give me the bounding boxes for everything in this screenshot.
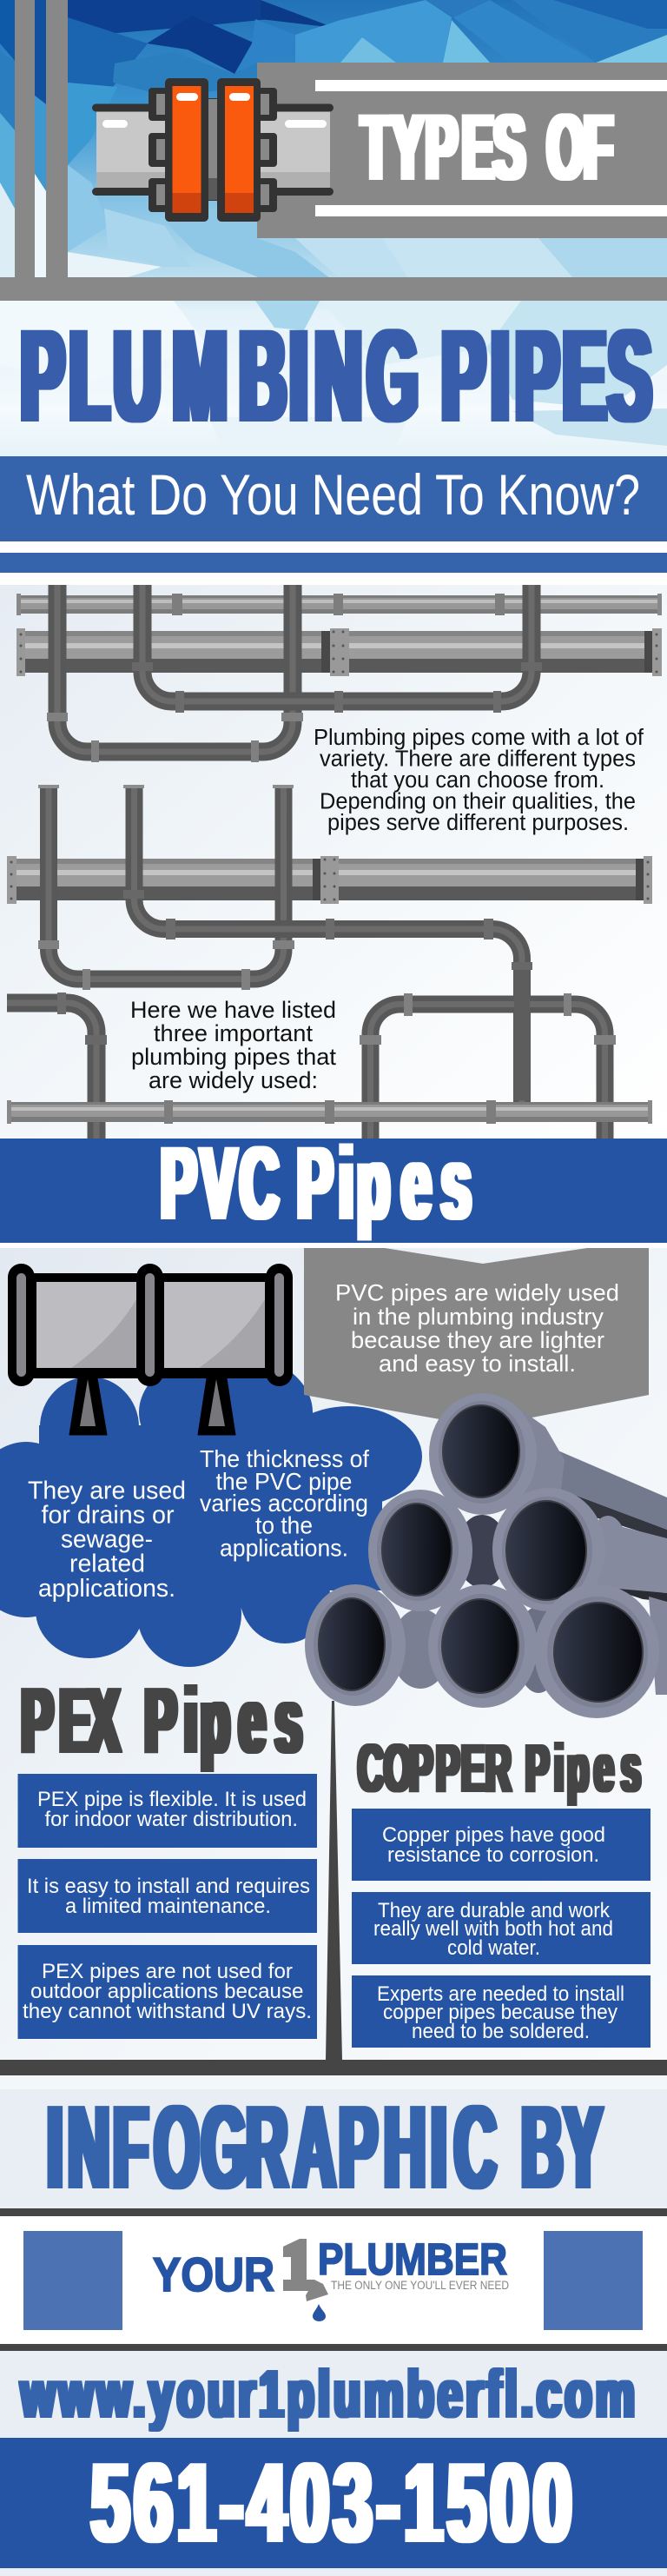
divider between pex and copper (326, 1701, 342, 2060)
logo: your 1 plumber: YOUR (153, 2247, 274, 2301)
logo: your 1 plumber: THE ONLY ONE YOU'LL EVER NEED (331, 2279, 509, 2292)
card: pex easy to install: a limited maintenance. (65, 1895, 271, 1918)
title banner: types of (257, 63, 667, 238)
card: pex flexible: for indoor water distribution. (45, 1808, 298, 1831)
callout text: PVC pipes are widely used (335, 1279, 619, 1305)
cloud text: left: related (69, 1550, 145, 1578)
card: copper durable: cold water. (447, 1936, 540, 1960)
card: pex outdoor: outdoor applications because (30, 1980, 304, 2003)
pipe network: lower (7, 785, 652, 1139)
blue strip (0, 553, 667, 573)
cloud shape (0, 1351, 422, 1667)
intro text: that you can choose from. (351, 768, 604, 793)
footer panel: infographic by (0, 2075, 667, 2213)
card: pex outdoor: PEX pipes are not used for (42, 1960, 293, 1983)
card: copper experts (352, 1975, 650, 2048)
dark band (0, 2060, 667, 2075)
icon: pipe on stands (8, 1264, 293, 1435)
panel: pvc pipes and pex / copper background (0, 1248, 667, 2060)
horizontal gray band (0, 277, 667, 301)
card: pex outdoor (17, 1945, 317, 2039)
card: copper durable: They are durable and work (378, 1899, 611, 1922)
logo: your 1 plumber: PLUMBER (318, 2234, 507, 2284)
callout text: because they are lighter (351, 1327, 604, 1353)
cloud text: left: sewage- (61, 1526, 153, 1554)
square left (23, 2231, 122, 2330)
illustration: stack of pvc pipes (305, 1393, 667, 1718)
card: pex easy to install: It is easy to install and requires (27, 1875, 310, 1898)
intro text: variety. There are different types (320, 747, 636, 772)
card: copper corrosion: Copper pipes have good (382, 1823, 605, 1847)
card: pex easy to install (17, 1859, 317, 1933)
heading band: pvc pipes (0, 1126, 667, 1243)
panel: website (0, 2351, 667, 2438)
cloud text: right: the PVC pipe (215, 1468, 353, 1495)
cloud text: right: applications. (220, 1535, 348, 1561)
heading: plumbing pipes: PLUMBING PIPES (21, 304, 651, 449)
card: copper durable: really well with both hot and (373, 1917, 613, 1941)
cloud text: left (28, 1477, 186, 1603)
heading: infographic by: INFOGRAPHIC BY (47, 2081, 603, 2213)
card: copper experts: need to be soldered. (412, 2020, 590, 2043)
subtitle band (0, 456, 667, 541)
second intro text (130, 997, 337, 1093)
pipe network: upper (17, 585, 662, 762)
cloud text: right: The thickness of (200, 1445, 369, 1472)
second intro text: plumbing pipes that (131, 1044, 337, 1070)
card: copper corrosion: resistance to corrosion. (387, 1843, 599, 1867)
website url: www.your1plumberfl.com (20, 2356, 635, 2432)
card: pex flexible: PEX pipe is flexible. It is used (37, 1788, 307, 1811)
card: pex flexible (17, 1774, 317, 1848)
card: copper experts: Experts are needed to install (377, 1982, 624, 2006)
square right (544, 2231, 643, 2330)
card: copper experts: copper pipes because they (383, 2001, 618, 2024)
heading: copper pipes: COPPER Pipes (358, 1731, 641, 1806)
card: copper durable (352, 1892, 650, 1964)
second intro text: three important (154, 1020, 313, 1046)
second intro text: are widely used: (149, 1067, 318, 1093)
phone number: 561-403-1500 (91, 2440, 571, 2566)
cloud text: left: for drains or (42, 1502, 175, 1530)
callout text: and easy to install. (379, 1351, 576, 1377)
cloud text: right: varies according (200, 1490, 368, 1517)
logo: your 1 plumber (153, 2234, 509, 2321)
second intro text: Here we have listed (130, 997, 336, 1023)
dark band (0, 2208, 667, 2216)
dark band (0, 2344, 667, 2351)
intro text: Depending on their qualities, the (320, 789, 636, 813)
vertical header pipes (15, 0, 68, 278)
header panel: low-poly blue background (0, 0, 667, 457)
intro text (314, 726, 644, 835)
heading: types of: TYPES OF (361, 96, 613, 200)
heading: pvc pipes: PVC Pipes (161, 1126, 471, 1240)
callout: gray banner (304, 1248, 649, 1427)
panel: logo row (0, 2216, 667, 2344)
card: copper corrosion (352, 1809, 650, 1881)
panel: phone (0, 2438, 667, 2568)
panel: pex pipes (17, 1670, 317, 2039)
card: pex outdoor: they cannot withstand UV rays. (23, 2000, 312, 2023)
heading: pex pipes: PEX Pipes (21, 1670, 302, 1772)
panel: pipe network intro (0, 585, 667, 1139)
cloud text: right (200, 1445, 369, 1561)
callout text: in the plumbing industry (353, 1304, 604, 1330)
intro text: pipes serve different purposes. (327, 811, 629, 835)
panel: copper pipes (352, 1731, 650, 2048)
cloud text: left: applications. (38, 1575, 175, 1603)
bottom strip (0, 2568, 667, 2576)
icon: pipe coupling (92, 78, 334, 222)
cloud text: right: to the (255, 1512, 313, 1538)
cloud text: left: They are used (28, 1477, 186, 1505)
intro text: Plumbing pipes come with a lot of (314, 726, 644, 750)
callout text (335, 1279, 619, 1377)
